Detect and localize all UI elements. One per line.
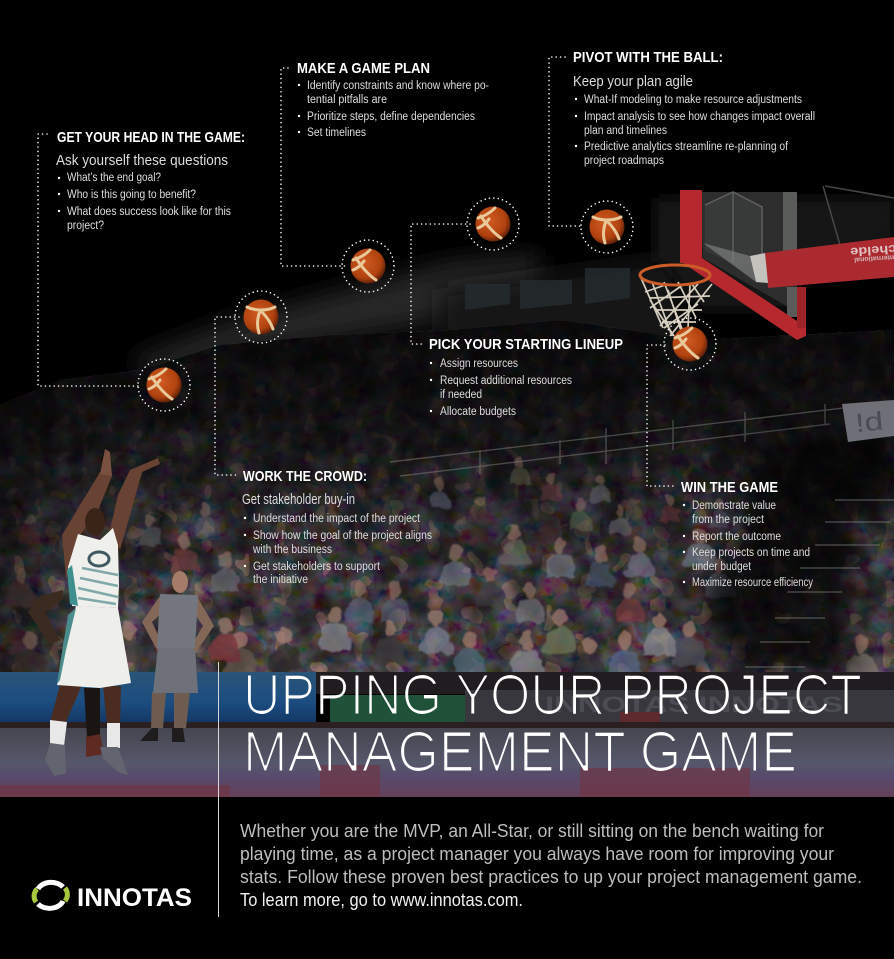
banner grey <box>465 690 894 726</box>
defender jersey <box>157 594 198 648</box>
heading: PICK YOUR STARTING LINEUP <box>429 336 623 353</box>
paragraph line 3: stats. Follow these proven best practices to up your project management game. <box>240 867 862 887</box>
left vignette <box>0 380 120 672</box>
bullets: tential pitfalls are <box>307 94 387 106</box>
individual spectators far <box>19 456 730 546</box>
panel: pick your starting lineup <box>411 198 623 418</box>
jersey <box>68 528 119 608</box>
arm left <box>62 472 112 578</box>
connector <box>549 57 583 226</box>
ball <box>235 291 287 343</box>
individual spectators mid <box>5 524 735 622</box>
crowd heads near <box>0 500 894 690</box>
ball <box>581 201 633 253</box>
balcony windows <box>465 268 630 310</box>
floor red stripes <box>0 765 750 797</box>
player: defender <box>140 571 214 742</box>
defender head <box>172 571 188 593</box>
panel: make a game plan <box>281 60 489 292</box>
background arm <box>28 590 63 644</box>
bullets: Allocate budgets <box>440 406 516 418</box>
subheading: Ask yourself these questions <box>56 152 228 169</box>
bullets: Predictive analytics streamline re-planning of <box>584 141 789 153</box>
connector <box>281 68 345 266</box>
shorts stripe <box>57 608 76 684</box>
bullets: What does success look like for this <box>67 206 231 218</box>
ad bottom band <box>0 722 894 729</box>
connector <box>215 317 239 475</box>
red lower strut <box>797 287 806 328</box>
heading: WIN THE GAME <box>681 479 778 496</box>
bullets <box>683 500 813 589</box>
bullets: project? <box>67 220 104 232</box>
connector <box>647 345 677 486</box>
bullets: if needed <box>440 389 482 401</box>
banner red accent <box>620 712 660 726</box>
defender legs <box>151 692 190 728</box>
bullets: Identify constraints and know where po- <box>307 80 489 92</box>
banner blue <box>0 672 316 722</box>
arena photo background <box>0 255 894 797</box>
ball <box>664 318 716 370</box>
heading: WORK THE CROWD: <box>243 468 367 485</box>
jersey stripes <box>78 568 118 604</box>
ball <box>138 359 190 411</box>
heading: GET YOUR HEAD IN THE GAME: <box>57 129 245 146</box>
bullets: project roadmaps <box>584 155 664 167</box>
bullets: Keep projects on time and <box>692 547 810 559</box>
crowd <box>0 320 894 690</box>
backboard and hoop <box>640 186 894 340</box>
glass panel <box>705 192 762 268</box>
dark area behind backboard <box>655 198 894 310</box>
bullets: Report the outcome <box>692 531 781 543</box>
logo <box>34 882 192 912</box>
player: shooter <box>45 449 160 776</box>
stairs <box>745 500 894 667</box>
subheading: Get stakeholder buy-in <box>242 491 355 508</box>
arm right <box>110 458 160 550</box>
stairs dark zone <box>700 430 894 672</box>
shoes <box>45 743 128 776</box>
background leg <box>84 688 100 737</box>
bullets: Get stakeholders to support <box>253 561 381 573</box>
bullets: the initiative <box>253 574 308 586</box>
logo wordmark: INNOTAS <box>77 884 192 912</box>
jersey teal side <box>67 565 78 606</box>
connector <box>411 224 470 344</box>
heading: PIVOT WITH THE BALL: <box>573 49 723 66</box>
player: background arm and leg <box>28 590 104 757</box>
red arm <box>765 237 894 288</box>
defender shoes <box>140 728 185 742</box>
net <box>641 278 712 336</box>
banner dark <box>316 672 894 694</box>
socks <box>50 720 120 748</box>
bullets <box>430 358 572 418</box>
individual spectators near <box>14 606 879 672</box>
jersey logo <box>89 552 109 566</box>
railing <box>390 402 894 476</box>
subheading: Keep your plan agile <box>573 73 693 90</box>
floor <box>0 728 894 797</box>
background shoe <box>86 734 104 757</box>
bullets: under budget <box>692 561 752 573</box>
bullets <box>298 80 489 139</box>
bullets: Assign resources <box>440 358 518 370</box>
panel: get your head in the game <box>38 129 245 411</box>
banner faint brand: INNOTAS INNOTAS <box>545 692 843 717</box>
ball <box>342 240 394 292</box>
balcony wall <box>440 255 680 345</box>
bullets: Who is this going to benefit? <box>67 189 196 201</box>
vertical divider <box>218 662 220 917</box>
rim <box>640 265 710 285</box>
crowd base <box>0 320 894 672</box>
sign letters: !d <box>854 406 884 438</box>
hand left <box>100 449 112 476</box>
glass frame lines <box>705 192 762 262</box>
bullets: Demonstrate value <box>692 500 776 512</box>
bracket <box>750 253 768 283</box>
darkening overlay <box>0 320 894 672</box>
bullets: Maximize resource efficiency <box>692 577 813 589</box>
bullets: Set timelines <box>307 127 366 139</box>
bullets: Request additional resources <box>440 375 572 387</box>
intro paragraph <box>240 821 862 910</box>
bullets: Impact analysis to see how changes impact overall <box>584 111 815 123</box>
crowd heads far <box>0 320 894 535</box>
bullets: with the business <box>252 544 332 556</box>
title line 2: MANAGEMENT GAME <box>243 720 797 784</box>
legs <box>50 685 121 724</box>
panel: pivot with the ball <box>549 49 815 253</box>
defender shorts <box>153 646 198 693</box>
heading: MAKE A GAME PLAN <box>297 60 430 77</box>
sign <box>842 400 894 442</box>
bullets: What’s the end goal? <box>67 172 161 184</box>
upper stand haze <box>130 255 540 375</box>
bullets: from the project <box>692 514 765 526</box>
bullets: Show how the goal of the project aligns <box>253 530 432 542</box>
shorts <box>57 606 131 688</box>
bullets <box>58 172 231 232</box>
bullets: What-If modeling to make resource adjustments <box>584 94 802 106</box>
bullets: plan and timelines <box>584 125 667 137</box>
connector <box>38 134 140 386</box>
panel: work the crowd <box>215 291 432 586</box>
camera arm <box>823 186 894 245</box>
defender arms <box>142 596 214 652</box>
paragraph line 1: Whether you are the MVP, an All-Star, or still sitting on the bench waiting for <box>240 821 824 841</box>
bullets <box>575 94 815 167</box>
crowd shadow patches <box>0 320 894 672</box>
bullets: Understand the impact of the project <box>253 513 421 525</box>
glass backboard <box>700 192 797 312</box>
grey support <box>783 192 797 317</box>
white glass splash <box>703 243 756 282</box>
head <box>85 508 105 536</box>
title <box>243 663 862 784</box>
bullets <box>244 513 432 586</box>
red post <box>680 190 806 340</box>
banner green <box>330 695 465 722</box>
logo ring <box>34 882 67 908</box>
bullets: Prioritize steps, define dependencies <box>307 111 475 123</box>
ball <box>467 198 519 250</box>
panel: win the game <box>647 318 813 589</box>
paragraph line 2: playing time, as a project manager you always have room for improving your <box>240 844 834 864</box>
call to action: To learn more, go to www.innotas.com. <box>240 890 523 910</box>
crowd colour noise <box>0 320 894 672</box>
